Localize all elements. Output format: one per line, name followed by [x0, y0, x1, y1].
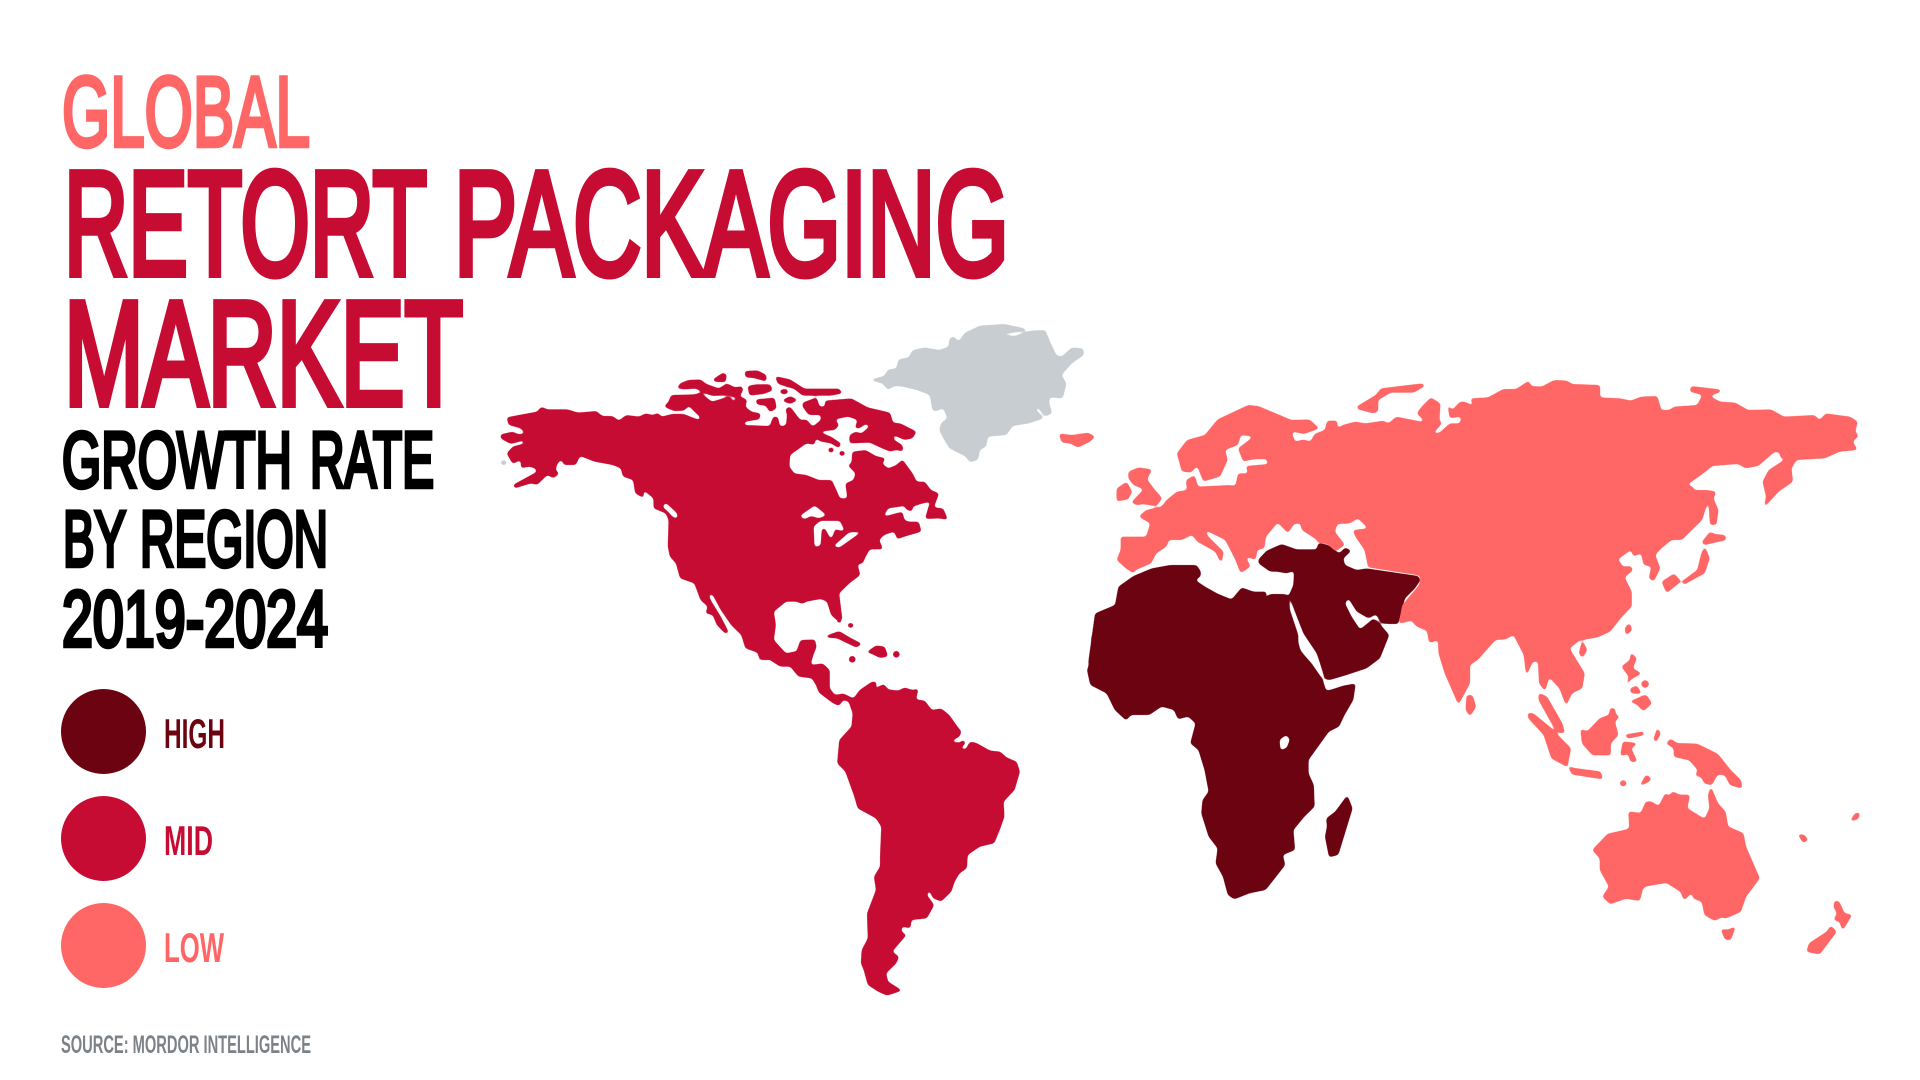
- subtitle line 2: [63, 495, 328, 583]
- legend label: high: HIGH: [164, 710, 225, 757]
- legend label: mid: MID: [164, 817, 213, 864]
- heading: global: GLOBAL: [62, 56, 310, 167]
- legend: [61, 689, 225, 988]
- heading: retort packaging: [64, 142, 1009, 306]
- map cutout: lake victoria: [1280, 736, 1289, 749]
- legend label: low: LOW: [164, 924, 224, 971]
- subtitle line 1: GROWTH: [62, 416, 292, 504]
- subtitle line 2: REGION: [140, 495, 328, 583]
- subtitle line 3: 2019-2024: [62, 575, 328, 663]
- map region: africa and middle east: [1087, 543, 1421, 899]
- legend swatch: high: [61, 689, 146, 774]
- subtitle line 2: BY: [63, 495, 126, 583]
- map region: north america: [500, 370, 948, 660]
- map region: iceland: [1059, 433, 1096, 448]
- title: [62, 56, 1009, 436]
- map region: southeast asia and oceania: [1528, 693, 1860, 954]
- map region: europe and asia: [1117, 380, 1859, 717]
- subtitle line 1: RATE: [310, 416, 434, 504]
- source note: SOURCE: MORDOR INTELLIGENCE: [61, 1031, 311, 1059]
- map region: greenland: [500, 324, 1084, 465]
- subtitle: [62, 416, 434, 663]
- heading: retort packaging: PACKAGING: [454, 142, 1009, 306]
- map cutouts: north american lakes: [664, 504, 859, 547]
- legend swatch: low: [61, 903, 146, 988]
- heading: retort packaging: RETORT: [64, 142, 427, 306]
- map region: central and south america: [760, 618, 1020, 996]
- world map: [500, 324, 1860, 996]
- heading: market: MARKET: [64, 272, 463, 436]
- legend swatch: mid: [61, 796, 146, 881]
